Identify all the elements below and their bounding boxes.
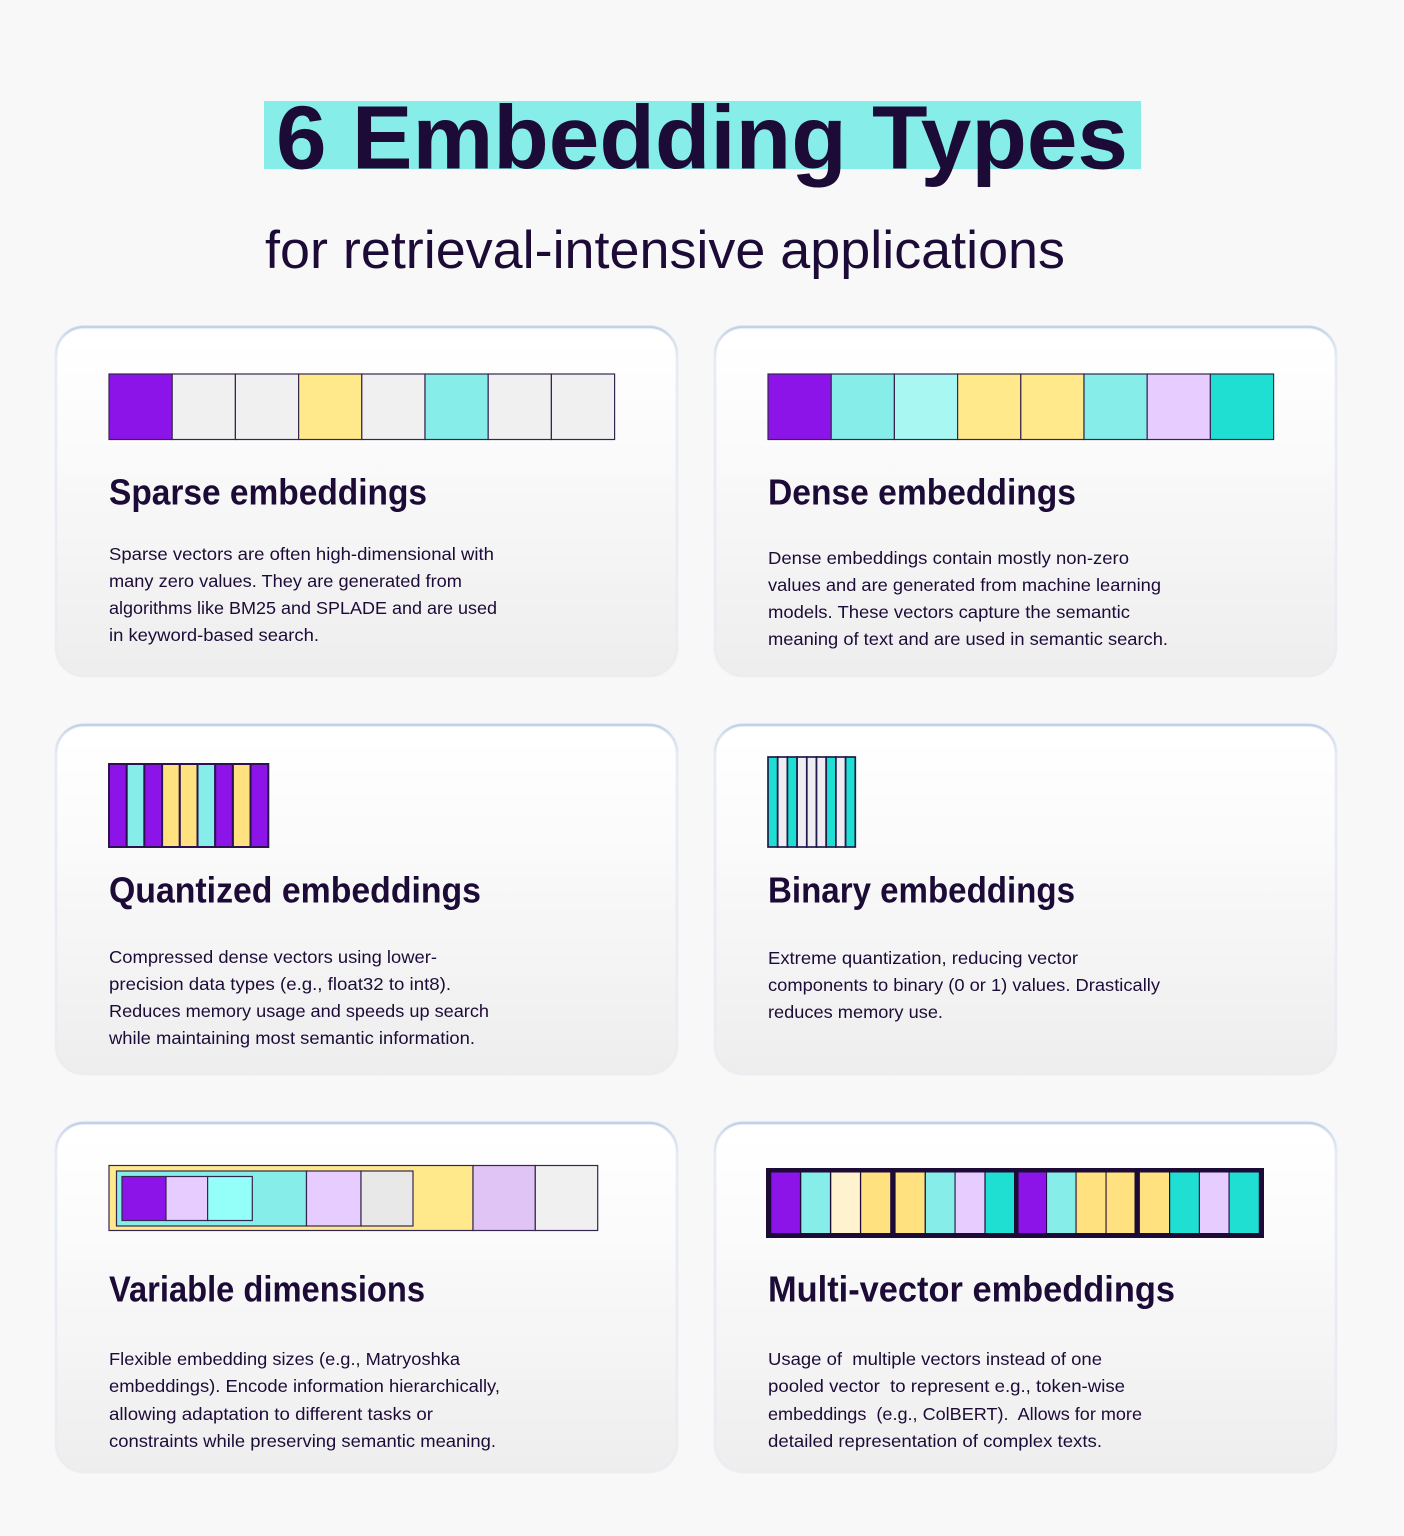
description (108, 947, 489, 1048)
description: Compressed dense vectors using lower- (109, 947, 437, 967)
description: in keyword-based search. (109, 625, 319, 645)
description: precision data types (e.g., float32 to int8). (109, 974, 451, 994)
subtitle: for retrieval-intensive applications (265, 221, 1065, 280)
description (768, 548, 1168, 649)
description (768, 948, 1160, 1022)
description: Flexible embedding sizes (e.g., Matryoshka (109, 1349, 460, 1369)
description: embeddings (e.g., ColBERT). Allows for more (768, 1404, 1142, 1424)
description: algorithms like BM25 and SPLADE and are used (109, 598, 497, 618)
title highlight (264, 101, 1141, 169)
description: constraints while preserving semantic meaning. (109, 1431, 496, 1451)
quantized vector graphic (109, 764, 268, 847)
heading: Binary embeddings (768, 870, 1075, 910)
description: meaning of text and are used in semantic search. (768, 629, 1168, 649)
description: many zero values. They are generated from (109, 571, 462, 591)
heading: Multi-vector embeddings (768, 1268, 1175, 1310)
panel: multi-vector embeddings (715, 1123, 1336, 1472)
description: Dense embeddings contain mostly non-zero (768, 548, 1129, 568)
multi-vector graphic (766, 1168, 1264, 1238)
dense vector graphic (768, 374, 1274, 440)
description: reduces memory use. (768, 1002, 943, 1022)
description: Reduces memory usage and speeds up search (109, 1001, 489, 1021)
description: values and are generated from machine learning (768, 575, 1161, 595)
panel: dense embeddings (715, 327, 1336, 676)
heading: Dense embeddings (768, 472, 1076, 512)
description (109, 1349, 500, 1451)
heading: Variable dimensions (109, 1268, 425, 1310)
title text: 6 Embedding Types (276, 88, 1128, 188)
binary vector graphic (768, 757, 855, 847)
description: components to binary (0 or 1) values. Drastically (768, 975, 1160, 995)
panel: variable dimensions (56, 1123, 677, 1472)
description: detailed representation of complex texts. (768, 1431, 1102, 1451)
title (264, 88, 1141, 188)
description: allowing adaptation to different tasks or (109, 1404, 433, 1424)
description: Sparse vectors are often high-dimensional with (109, 544, 494, 564)
panel: quantized embeddings (56, 725, 677, 1074)
description: while maintaining most semantic information. (108, 1028, 475, 1048)
heading: Quantized embeddings (109, 870, 481, 910)
description: Usage of multiple vectors instead of one (768, 1349, 1102, 1369)
nested vector graphic (109, 1166, 598, 1230)
description: pooled vector to represent e.g., token-wise (768, 1376, 1125, 1396)
sparse vector graphic (109, 374, 615, 440)
heading: Sparse embeddings (109, 472, 427, 512)
description (109, 544, 497, 645)
description: models. These vectors capture the semantic (768, 602, 1130, 622)
panel: sparse embeddings (56, 327, 677, 676)
description (768, 1349, 1142, 1451)
panel: binary embeddings (715, 725, 1336, 1074)
description: embeddings). Encode information hierarchically, (109, 1376, 500, 1396)
description: Extreme quantization, reducing vector (768, 948, 1078, 968)
